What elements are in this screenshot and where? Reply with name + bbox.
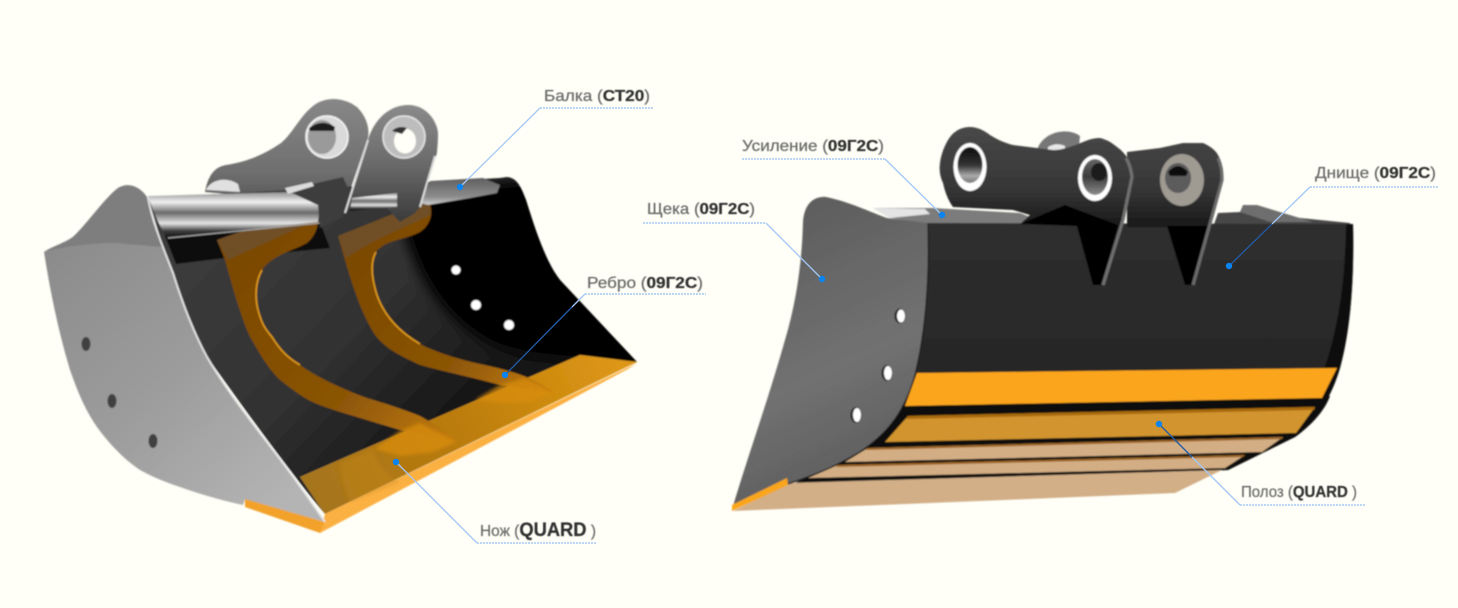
side holes <box>82 337 158 448</box>
label: Полоз (QUARD) <box>1156 421 1365 505</box>
right beam <box>420 178 500 205</box>
small plate on gusset <box>285 182 314 194</box>
rear mounting lug <box>205 99 368 205</box>
strip two shadow line <box>906 407 1315 419</box>
ring highlight <box>1048 144 1065 150</box>
strip one <box>905 368 1337 406</box>
label: Ребро (09Г2С): Ребро ( 09Г2С) <box>587 275 703 292</box>
orange cutting edge, lighter front strip <box>320 363 637 533</box>
strip three shadow line <box>866 437 1283 450</box>
tan bottom plate <box>733 470 1222 511</box>
strip two <box>885 407 1315 442</box>
side holes <box>850 308 906 423</box>
rib one <box>217 206 457 442</box>
bucket back plate silhouette <box>790 223 1353 486</box>
label: Полоз (QUARD): Полоз (QUARD ) <box>1241 484 1357 501</box>
near ear with gusset <box>940 127 1132 285</box>
rib one dull top <box>217 206 318 260</box>
rear ring behind lugs <box>1037 131 1080 155</box>
strip four <box>808 455 1245 478</box>
inner bucket wall <box>148 177 637 514</box>
reinforcement strip <box>873 208 1030 224</box>
side plate <box>733 197 928 506</box>
far gusset black interior <box>1167 226 1208 285</box>
rib two foot on blade <box>475 378 553 403</box>
top tube left <box>148 192 320 238</box>
near ear edge <box>1103 158 1132 285</box>
ring middle <box>1078 155 1112 201</box>
black right edge <box>1285 224 1353 438</box>
dark gusset <box>287 177 350 228</box>
blade soft reflection <box>340 449 400 502</box>
black rear wall area <box>399 177 637 366</box>
rear bar <box>1240 205 1313 222</box>
ring right <box>1160 154 1204 206</box>
label: Усиление (09Г2С): Усиление ( 09Г2С) <box>742 138 884 155</box>
label: Ребро (09Г2С) <box>502 275 706 378</box>
far ear and gusset <box>1127 143 1222 285</box>
label: Нож (QUARD): Нож (QUARD ) <box>480 520 596 541</box>
front mounting lug <box>345 105 438 222</box>
label: Нож (QUARD) <box>393 459 597 543</box>
rib two <box>338 200 553 392</box>
strip four shadow line <box>836 455 1245 467</box>
strip three <box>845 437 1283 462</box>
rib two dull top <box>338 200 431 258</box>
label: Днище (09Г2С): Днище ( 09Г2С) <box>1315 165 1436 182</box>
label: Щека (09Г2С) <box>643 201 825 282</box>
far ear edge <box>1193 158 1222 285</box>
side blade tip <box>732 478 788 511</box>
tube segment through lug <box>350 193 397 211</box>
label: Щека (09Г2С): Щека (09Г2С) <box>647 201 755 218</box>
right bucket: rear view <box>732 127 1353 511</box>
side plate upper facet <box>44 185 163 252</box>
label: Балка (СТ20): Балка (СТ20) <box>544 88 650 105</box>
left bucket: front-inside view <box>44 99 660 533</box>
inner wall holes <box>452 266 514 330</box>
side plate front edge highlight <box>148 198 325 522</box>
label: Усиление (09Г2С) <box>742 138 945 218</box>
strip white highlight <box>873 208 930 218</box>
lug two edges <box>345 140 435 213</box>
side plate <box>44 185 325 522</box>
black lower gaps <box>800 396 1330 482</box>
rib two highlight <box>372 252 420 344</box>
orange side blade <box>245 498 325 533</box>
ring one <box>306 116 348 158</box>
thin line under tube <box>168 223 320 238</box>
ring two <box>383 116 425 158</box>
black band under tube <box>165 222 330 264</box>
label: Балка (СТ20) <box>457 88 653 190</box>
rib one foot on blade <box>375 423 457 456</box>
near gusset black interior <box>1020 205 1118 285</box>
label: Днище (09Г2С) <box>1226 165 1438 269</box>
rear top surface <box>1213 212 1350 227</box>
side plate edge <box>788 223 928 484</box>
ring left <box>954 143 986 191</box>
ring small <box>206 180 240 192</box>
rib one highlight <box>256 270 300 365</box>
orange cutting edge, top face <box>300 355 637 514</box>
